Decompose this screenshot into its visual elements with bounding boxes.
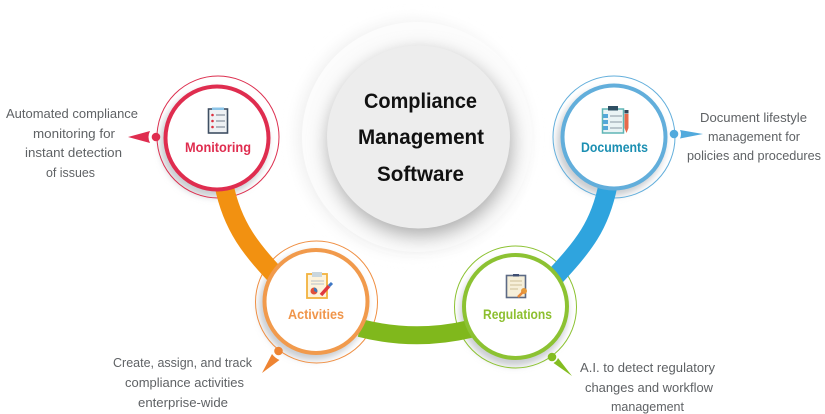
title: Software	[377, 162, 464, 186]
activities callout pointer	[262, 347, 283, 373]
regulations description: A.I. to detect regulatory	[580, 360, 716, 375]
icon: signed document	[506, 274, 527, 298]
icon: document list and pencil	[602, 106, 628, 133]
regulations description: changes and workflow	[585, 380, 714, 395]
monitoring description: Automated compliance	[6, 106, 138, 121]
regulations description	[580, 360, 716, 414]
title: Management	[358, 125, 484, 149]
documents ring	[562, 86, 666, 188]
activities ring	[264, 250, 368, 353]
title	[358, 89, 484, 186]
regulations label: Regulations	[483, 306, 552, 322]
monitoring description: of issues	[46, 165, 95, 180]
documents label: Documents	[581, 139, 648, 155]
activities label: Activities	[288, 306, 344, 322]
icon: checklist clipboard	[208, 108, 228, 133]
node shadows	[160, 88, 665, 366]
documents description: policies and procedures	[687, 148, 821, 163]
hub disc	[327, 46, 510, 228]
panel: central hub	[297, 21, 532, 253]
panel: activities	[113, 250, 368, 410]
documents callout pointer	[670, 130, 703, 138]
hub halo shadow	[297, 21, 529, 253]
regulations callout pointer	[548, 353, 572, 376]
monitoring ring	[166, 86, 268, 190]
panel: documents	[562, 86, 821, 188]
activities description: compliance activities	[125, 375, 244, 390]
hub halo	[302, 22, 532, 252]
hub disc shadow	[329, 53, 511, 235]
regulations ring	[464, 255, 567, 358]
regulations description: management	[611, 399, 684, 414]
arrow: blue connector	[550, 185, 608, 282]
documents description: management for	[708, 129, 801, 144]
activities description	[113, 355, 252, 410]
arrow: orange connector	[224, 185, 285, 285]
monitoring callout pointer	[128, 131, 160, 143]
monitoring description: instant detection	[25, 145, 122, 160]
panel: monitoring	[6, 86, 268, 190]
documents description	[687, 110, 821, 163]
arrow: green connector	[360, 328, 470, 335]
documents description: Document lifestyle	[700, 110, 807, 125]
outer thin rings	[157, 76, 675, 368]
monitoring description: monitoring for	[33, 126, 116, 141]
activities description: enterprise-wide	[138, 395, 228, 410]
monitoring description	[6, 106, 138, 180]
icon: clipboard with chart and pencil	[307, 272, 332, 298]
title: Compliance	[364, 89, 477, 113]
activities description: Create, assign, and track	[113, 355, 252, 370]
monitoring label: Monitoring	[185, 139, 251, 155]
panel: regulations	[464, 255, 716, 414]
